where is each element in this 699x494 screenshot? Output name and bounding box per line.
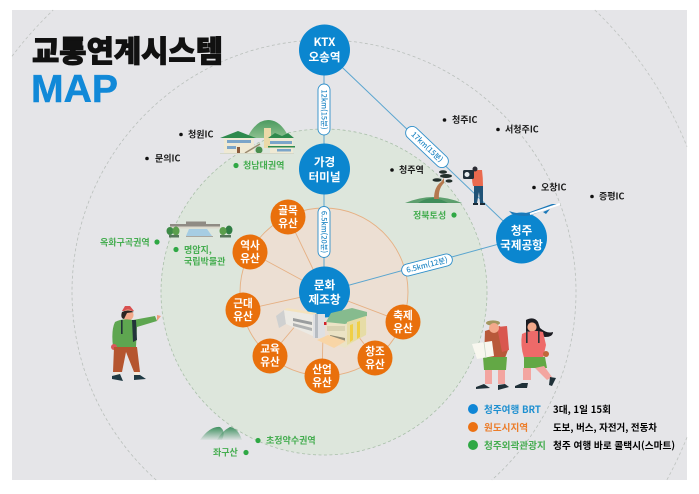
title [31,27,223,111]
legend: 3대, 1일 15회 [553,402,611,416]
legend: 도보, 버스, 자전거, 전동차 [553,420,657,434]
place label: Ochang IC: 오창IC [541,180,567,194]
place label: Cheongju station: 청주역 [399,163,424,176]
place label: Myeongamji and museum: 국립박물관 [184,254,226,268]
illustration: culture factory building [276,308,367,348]
place label: Seocheongju IC: 서청주IC [505,122,539,136]
node: airport [496,212,547,264]
distance pill: 17km [403,124,451,170]
place label: Cheongnamdae: 청남대권역 [243,158,284,172]
node: terminal: 터미널 [308,169,340,185]
title: MAP [31,68,118,111]
heritage: festival: 유산 [393,321,413,336]
heritage: education: 유산 [260,354,280,370]
node: KTX [299,24,350,76]
heritage: industry [304,358,340,394]
illustration: Cheongnamdae [220,120,295,154]
place label: Myeongamji and museum [173,243,226,268]
heritage: festival [386,304,420,340]
distance pill: 6.5km to airport: 6.5km(12분) [405,254,449,276]
legend [468,402,675,452]
illustration: Jwagu mountain [200,427,242,440]
heritage: industry: 산업 [312,362,332,377]
illustration: national museum [166,222,232,238]
place label: Jeungpyeong IC: 증평IC [599,190,625,202]
node: terminal [299,144,350,194]
legend: 원도시지역 [484,420,528,434]
place label: Chojeong: 초정약수권역 [266,434,316,446]
legend: 청주여행 BRT [484,402,541,416]
legend: 청주외곽관광지 [484,438,546,452]
illustration: walking hiker [515,318,556,388]
heritage: education [252,338,288,374]
heritage: alley: 골목 [278,203,298,218]
place label: Jwagu mountain: 좌구산 [213,446,239,458]
connection lines [324,50,521,292]
node: culture factory: 제조창 [308,292,341,308]
heritage: creation: 유산 [365,357,385,372]
place label: Jeongbuk fortress: 정북토성 [413,208,446,222]
illustration: photographer [463,166,485,205]
distance pill: 12km: 12km(15분) [318,89,330,130]
node: culture factory: 문화 [314,277,335,293]
illustration: pointing hiker [111,306,161,381]
place label: Cheongju IC: 청주IC [452,113,478,126]
distance pill: 17km: 17km(15분) [409,129,445,165]
illustration: airplane [509,204,560,216]
illustration: pine tree and fortress hill [405,170,462,203]
place label: Okhwa: 옥화구곡권역 [100,236,150,248]
heritage: history: 유산 [240,251,260,266]
heritage: creation: 창조 [365,344,385,359]
heritage: alley: 유산 [278,216,298,231]
heritage: industry: 유산 [312,375,332,390]
node: KTX: 오송역 [308,49,340,65]
place label: Jwagu mountain [213,446,249,458]
heritage: modern: 근대 [233,296,253,311]
node: KTX: KTX [314,34,336,50]
title: 교통연계시스템 [32,27,223,71]
heritage: festival: 축제 [393,308,413,323]
heritage: alley [270,200,306,234]
place label: Cheongwon IC: 청원IC [188,128,214,140]
place label: Munui IC: 문의IC [155,152,181,164]
illustration: map-reading hiker [472,320,509,390]
heritage: modern: 유산 [233,309,253,324]
heritage: modern [226,292,260,328]
node: airport: 국제공항 [500,237,543,253]
heritage: history [232,234,268,270]
node: airport: 청주 [511,222,532,238]
heritage spokes [243,217,403,376]
node: culture factory [299,266,350,318]
heritage: history: 역사 [240,238,260,253]
distance pill: 6.5km to terminal: 6.5km(20분) [318,211,330,253]
legend: 청주 여행 바로 콜택시(스마트) [553,438,675,452]
place label: Myeongamji and museum: 명암지, [184,243,212,256]
heritage: education: 교육 [260,342,280,356]
heritage: creation [358,340,392,376]
node: terminal: 가경 [314,154,335,170]
